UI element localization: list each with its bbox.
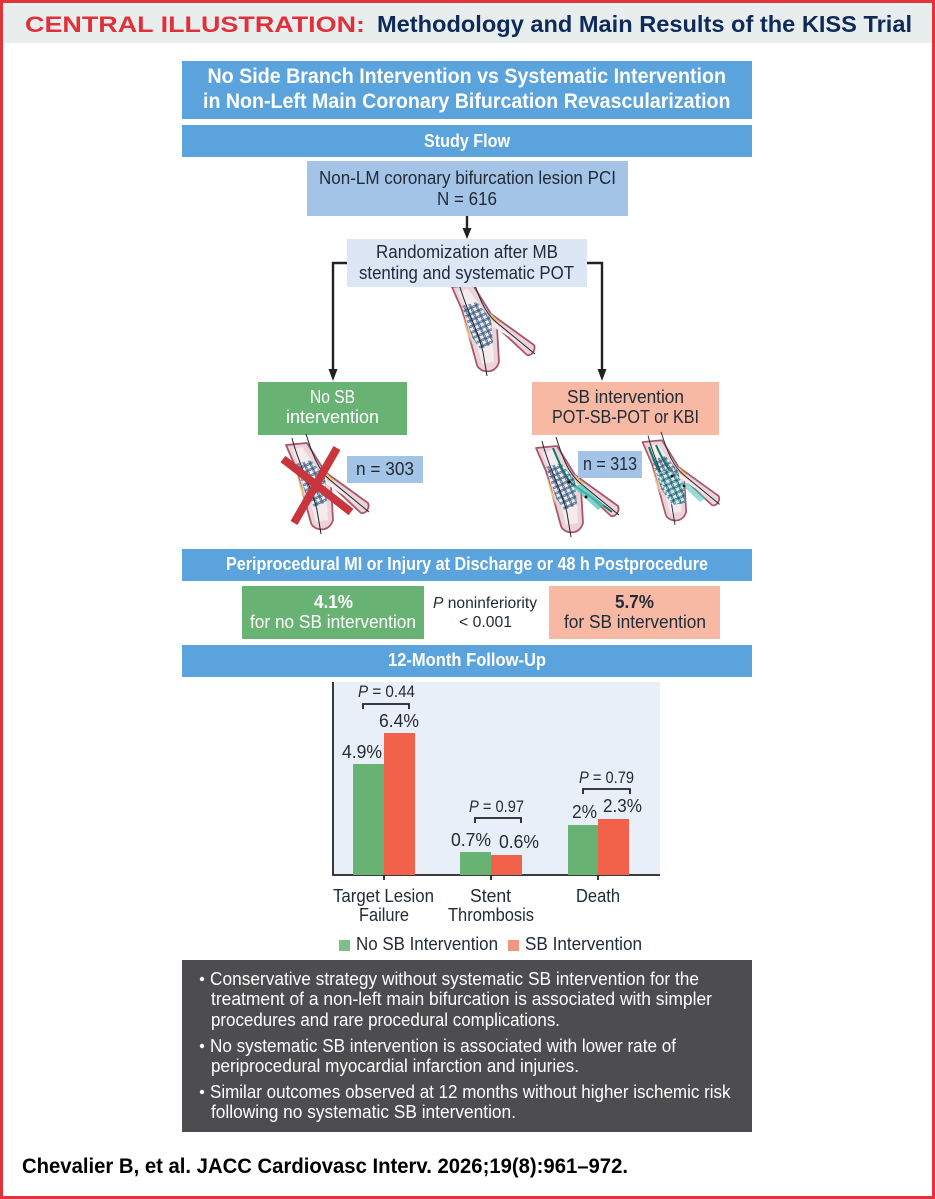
result: SB intervention — [549, 586, 720, 639]
takeaway 1: treatment of a non-left main bifurcation is associated with simpler — [211, 989, 712, 1009]
stent thrombosis bars: 0.6% — [499, 832, 539, 852]
p value: noninferiority: < 0.001 — [459, 614, 512, 631]
stent thrombosis bars — [448, 798, 539, 925]
stent thrombosis bars: Thrombosis — [448, 905, 534, 925]
heading: 12-month follow-up — [182, 645, 752, 677]
box: SB intervention: SB intervention — [567, 387, 684, 407]
icon: crossed-out bifurcation — [283, 434, 369, 534]
takeaway 3 — [200, 1082, 731, 1122]
takeaway 1: procedures and rare procedural complications. — [211, 1010, 560, 1030]
heading: periprocedural outcome: Periprocedural MI or Injury at Discharge or 48 h Postprocedure — [226, 554, 708, 574]
title band: CENTRAL ILLUSTRATION: — [25, 12, 365, 37]
legend: No SB Intervention — [356, 934, 498, 954]
legend — [339, 934, 642, 954]
takeaway 1: Conservative strategy without systematic SB intervention for the — [210, 969, 699, 989]
box: randomization — [347, 239, 587, 287]
arrow: to no SB intervention — [328, 263, 347, 381]
bar chart: 12-month outcomes — [333, 682, 660, 925]
death bars: Death — [576, 886, 620, 906]
heading: study flow — [182, 125, 752, 157]
takeaway 2 — [200, 1036, 677, 1076]
box: no SB intervention: No SB — [310, 387, 355, 407]
heading: trial comparison: in Non-Left Main Coronary Bifurcation Revascularization — [203, 90, 730, 113]
p value: noninferiority: P noninferiority — [433, 595, 537, 612]
stent thrombosis bars: Stent — [470, 886, 511, 906]
result: SB intervention: 5.7% — [615, 592, 654, 612]
heading: 12-month follow-up: 12-Month Follow-Up — [388, 650, 546, 670]
heading: periprocedural outcome — [182, 549, 752, 581]
takeaway 2: periprocedural myocardial infarction and injuries. — [211, 1056, 579, 1076]
death bars — [568, 769, 642, 906]
box: SB intervention: POT-SB-POT or KBI — [552, 407, 699, 427]
takeaway 3: following no systematic SB intervention. — [211, 1102, 516, 1122]
target lesion failure bars: Target Lesion — [333, 886, 434, 906]
title band: Methodology and Main Results of the KISS Trial — [377, 11, 912, 37]
arrow: enrolment to randomization — [462, 216, 472, 239]
citation: Chevalier B, et al. JACC Cardiovasc Interv. 2026;19(8):961–972. — [22, 1155, 628, 1178]
icon: stented bifurcation — [452, 276, 535, 376]
heading: trial comparison — [182, 61, 752, 119]
box: enrolled population: N = 616 — [437, 189, 497, 209]
result: no SB intervention: 4.1% — [314, 592, 353, 612]
stent thrombosis bars: P = 0.97 — [469, 798, 524, 816]
target lesion failure bars: 6.4% — [379, 711, 419, 731]
box: enrolled population — [307, 161, 628, 216]
heading: trial comparison: No Side Branch Intervention vs Systematic Intervention — [208, 65, 726, 88]
target lesion failure bars: 4.9% — [342, 742, 382, 762]
box: randomization: stenting and systematic POT — [359, 263, 574, 283]
box: no SB intervention — [258, 382, 407, 435]
result: no SB intervention: for no SB intervention — [250, 612, 416, 632]
box: randomization: Randomization after MB — [376, 242, 558, 262]
p value: noninferiority — [433, 595, 537, 631]
box: no SB intervention: intervention — [286, 407, 379, 427]
box: SB intervention — [532, 382, 719, 435]
heading: study flow: Study Flow — [424, 131, 511, 151]
legend: SB Intervention — [525, 934, 642, 954]
label: n = 303 — [347, 456, 423, 483]
target lesion failure bars: P = 0.44 — [358, 683, 415, 701]
result: no SB intervention — [242, 586, 424, 639]
target lesion failure bars: Failure — [359, 905, 409, 925]
box: enrolled population: Non-LM coronary bifurcation lesion PCI — [319, 168, 616, 188]
target lesion failure bars — [333, 683, 434, 925]
death bars: 2% — [572, 802, 597, 822]
icon: kissing balloon bifurcation — [642, 432, 720, 525]
death bars: 2.3% — [603, 796, 642, 816]
arrow: to SB intervention — [587, 263, 606, 381]
stent thrombosis bars: 0.7% — [451, 830, 491, 850]
label: n = 313: n = 313 — [583, 454, 637, 474]
takeaway 2: No systematic SB intervention is associated with lower rate of — [210, 1036, 677, 1056]
icon: POT-SB-POT bifurcation — [536, 437, 619, 537]
label: n = 313 — [578, 451, 642, 478]
result: SB intervention: for SB intervention — [564, 612, 706, 632]
death bars: P = 0.79 — [579, 769, 634, 787]
title band — [3, 3, 932, 43]
takeaway 3: Similar outcomes observed at 12 months without higher ischemic risk — [210, 1082, 731, 1102]
panel: key takeaways — [182, 960, 752, 1132]
label: n = 303: n = 303 — [356, 459, 414, 479]
takeaway 1 — [200, 969, 712, 1030]
